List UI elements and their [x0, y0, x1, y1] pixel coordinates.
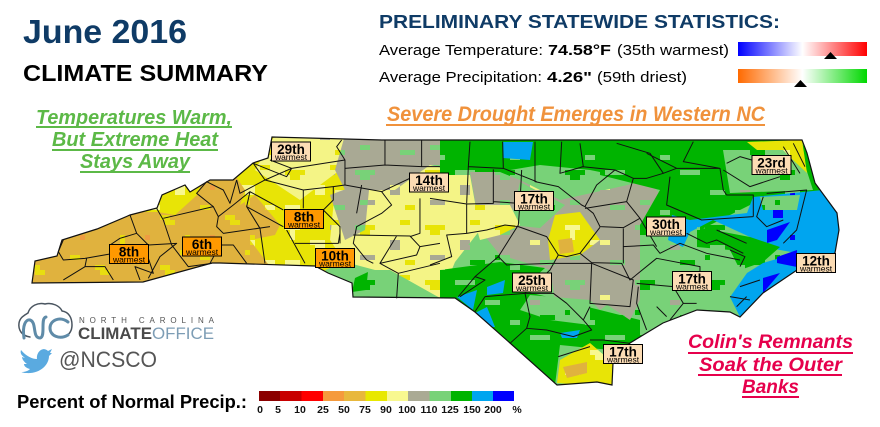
callout: Colin — [688, 332, 853, 398]
map shading — [32, 138, 838, 384]
rank label: 25th: 25th — [518, 273, 546, 288]
logo: North Carolina Climate Office — [19, 303, 215, 343]
rank label: 6th: warmest — [185, 247, 219, 257]
average precipitation statistic: Average Precipitation: — [379, 69, 542, 86]
legend labels: % — [512, 404, 522, 416]
rank label: 25th — [512, 273, 552, 293]
callout: temperatures: Temperatures Warm, — [36, 107, 232, 129]
rank label: 17th east: warmest — [675, 282, 709, 292]
legend labels — [257, 404, 522, 416]
legend labels: 5 — [275, 404, 281, 416]
logo: North Carolina Climate Office: CLIMATE — [78, 324, 152, 343]
rank label: 10th: warmest — [318, 258, 352, 268]
legend labels: 10 — [294, 404, 306, 416]
callout: Colin: Soak the Outer — [699, 355, 844, 376]
state outline — [32, 137, 839, 385]
legend labels: 200 — [484, 404, 502, 416]
rank label: 17th south — [604, 344, 642, 364]
rank label: 14th — [410, 173, 448, 193]
county lines west — [58, 140, 440, 298]
logo text: NORTH CAROLINA — [79, 316, 215, 325]
legend labels: 75 — [359, 404, 371, 416]
rank label: 8th piedmont — [284, 210, 324, 230]
rank label: 17th north: 17th — [520, 192, 548, 206]
rank label: 23rd: warmest — [754, 166, 788, 176]
rank label: 8th mountains: 8th — [119, 244, 139, 260]
legend title: Percent of Normal Precip.: — [17, 392, 247, 412]
rank label: 14th: 14th — [415, 173, 443, 188]
legend labels: 150 — [463, 404, 481, 416]
rank label: 29th: 29th — [277, 142, 305, 157]
county lines east — [430, 142, 807, 357]
rank label: 17th north: warmest — [517, 202, 551, 212]
rank label: 17th south: warmest — [606, 354, 640, 364]
rank label: 29th — [272, 142, 310, 162]
callout: temperatures: Stays Away — [80, 151, 191, 173]
legend labels: 0 — [257, 404, 263, 416]
callout: Colin: Colin's Remnants — [688, 332, 853, 353]
legend labels: 100 — [398, 404, 416, 416]
rank label: 6th — [182, 237, 222, 257]
rank label: 30th: warmest — [649, 227, 683, 237]
icon: twitter bird — [21, 349, 52, 373]
rank label: 23rd: 23rd — [757, 156, 786, 170]
rank label: 6th: 6th — [192, 237, 212, 252]
legend colour scale — [259, 391, 514, 401]
average temperature statistic: Average Temperature: — [379, 42, 543, 59]
average temperature statistic: (35th warmest) — [617, 42, 729, 59]
legend labels: 90 — [380, 404, 392, 416]
rank label: 17th north — [514, 192, 554, 212]
rank label: 17th east — [672, 272, 712, 292]
rank label: 14th: warmest — [412, 183, 446, 193]
rank label: 8th mountains — [110, 244, 148, 264]
rank label: 17th south: 17th — [609, 344, 637, 360]
twitter handle: @NCSCO — [59, 347, 157, 372]
rank label: 23rd — [752, 156, 791, 176]
rank label: 29th: warmest — [274, 152, 308, 162]
rank label: 25th: warmest — [515, 283, 549, 293]
callout: temperatures: But Extreme Heat — [52, 129, 219, 151]
title: June 2016 — [23, 13, 187, 50]
callout: drought: Severe Drought Emerges in Western NC — [387, 103, 766, 126]
average temperature statistic: 74.58°F — [548, 42, 611, 59]
logo: North Carolina Climate Office: OFFICE — [152, 324, 214, 343]
rank label: 8th piedmont: 8th — [294, 210, 314, 224]
average precipitation statistic: 4.26" — [547, 69, 592, 86]
rank label: 30th — [646, 217, 686, 237]
rank label: 17th east: 17th — [678, 272, 706, 286]
subtitle: CLIMATE SUMMARY — [23, 60, 268, 86]
icon: cloud with NC — [19, 303, 72, 338]
rank label: 12th: 12th — [802, 254, 830, 268]
rank label: 8th mountains: warmest — [112, 254, 146, 264]
callout: temperatures — [36, 107, 232, 173]
rank label: 10th: 10th — [321, 248, 349, 264]
legend labels: 25 — [317, 404, 329, 416]
callout: Colin: Banks — [742, 377, 799, 398]
legend labels: 125 — [441, 404, 459, 416]
statistics heading: PRELIMINARY STATEWIDE STATISTICS: — [379, 12, 780, 32]
average precipitation statistic: (59th driest) — [597, 69, 687, 86]
rank label: 10th — [316, 248, 354, 268]
legend labels: 50 — [338, 404, 350, 416]
rank label: 12th — [796, 254, 836, 274]
rank label: 8th piedmont: warmest — [287, 220, 321, 230]
precipitation gauge — [738, 69, 867, 87]
temperature gauge — [738, 42, 867, 59]
precipitation map of North Carolina — [20, 130, 850, 400]
legend labels: 110 — [421, 404, 438, 416]
rank label: 12th: warmest — [799, 264, 833, 274]
rank label: 30th: 30th — [652, 217, 680, 232]
